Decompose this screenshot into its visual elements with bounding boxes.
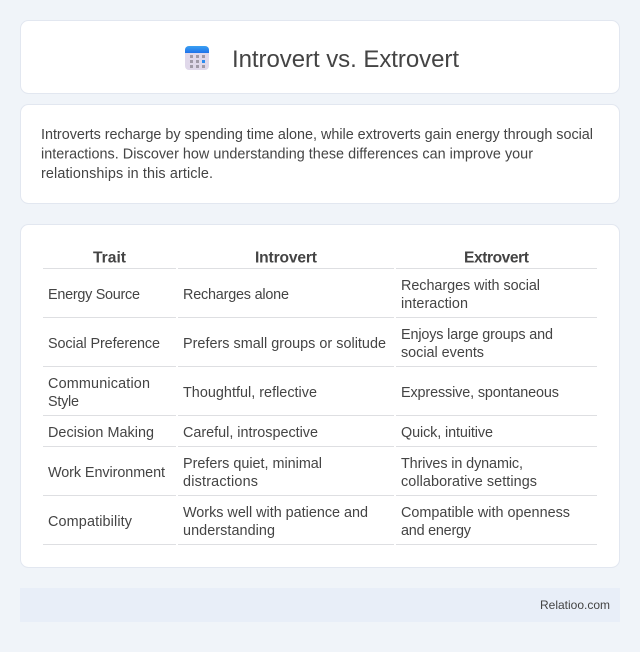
row: work environment — [43, 456, 597, 496]
table header row: Extrovert — [464, 250, 529, 266]
row: work environment: Thrives in dynamic, — [401, 456, 523, 472]
title: Introvert vs. Extrovert — [232, 46, 459, 73]
row: social preference: Social Preference — [48, 336, 160, 352]
row: decision making: Quick, intuitive — [401, 425, 493, 441]
row: communication style: Thoughtful, reflective — [183, 385, 317, 401]
row: communication style — [43, 376, 597, 416]
intro text: Introverts recharge by spending time alone, while extroverts gain energy through social — [41, 127, 593, 143]
row: compatibility — [43, 505, 597, 545]
row: work environment: distractions — [183, 474, 258, 490]
table header row — [43, 250, 597, 269]
row: compatibility: Works well with patience and — [183, 505, 368, 521]
footer bar — [20, 588, 620, 622]
row: energy source — [43, 278, 597, 318]
row: social preference: Enjoys large groups and — [401, 327, 553, 343]
table header row: Trait — [93, 250, 126, 266]
intro text: interactions. Discover how understanding these differences can improve your — [41, 146, 533, 162]
row: compatibility: Compatible with openness — [401, 505, 570, 521]
intro text — [41, 127, 593, 182]
row: decision making — [43, 425, 597, 447]
panel: introduction — [20, 104, 620, 204]
row: energy source: interaction — [401, 296, 468, 312]
row: work environment: Prefers quiet, minimal — [183, 456, 322, 472]
row: compatibility: Compatibility — [48, 514, 133, 530]
row: compatibility: and energy — [401, 523, 472, 539]
panel: comparison table — [20, 224, 620, 568]
table header row: Introvert — [255, 250, 317, 266]
footer credit: Relatioo.com — [540, 598, 610, 612]
row: social preference: Prefers small groups or solitude — [183, 336, 386, 352]
row: social preference: social events — [401, 345, 484, 361]
row: energy source: Recharges alone — [183, 287, 289, 303]
row: social preference — [43, 327, 597, 367]
row: communication style: Style — [48, 394, 79, 410]
row: communication style: Expressive, spontaneous — [401, 385, 559, 401]
row: communication style: Communication — [48, 376, 150, 392]
row: work environment: Work Environment — [48, 465, 165, 481]
icon: calendar — [185, 46, 209, 70]
row: energy source: Energy Source — [48, 287, 140, 303]
row: decision making: Decision Making — [48, 425, 154, 441]
row: energy source: Recharges with social — [401, 278, 540, 294]
row: compatibility: understanding — [183, 523, 275, 539]
intro text: relationships in this article. — [41, 166, 213, 182]
row: work environment: collaborative settings — [401, 474, 537, 490]
panel: title header — [20, 20, 620, 94]
row: decision making: Careful, introspective — [183, 425, 318, 441]
